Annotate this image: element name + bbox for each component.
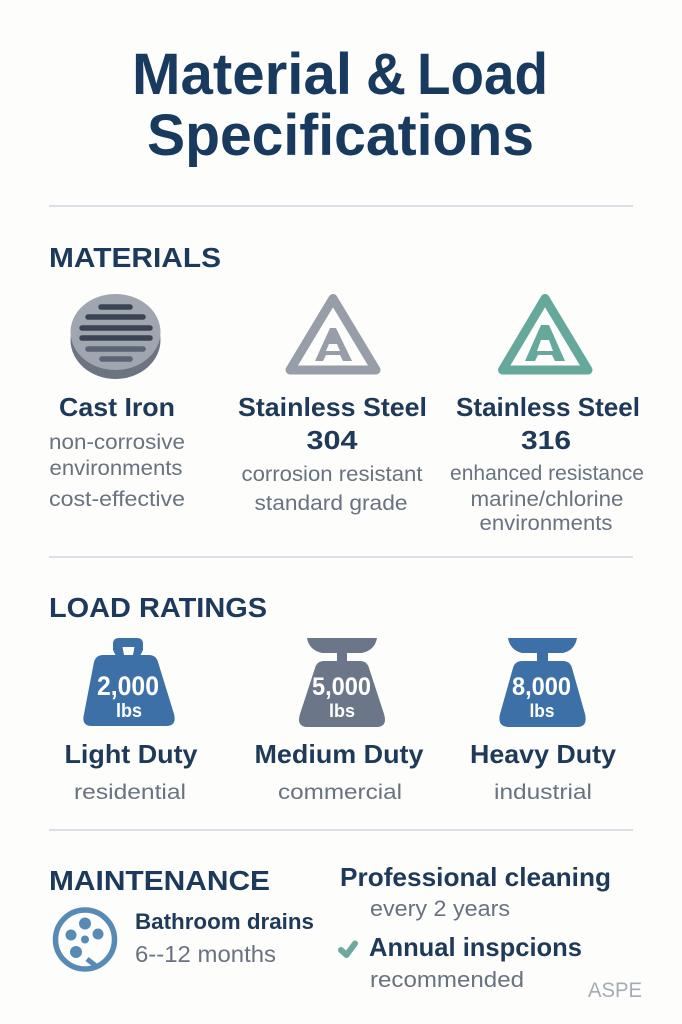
description: stainless steel 304: [242, 463, 423, 515]
title: Specifications: [147, 103, 534, 168]
note: recommended: recommended: [370, 967, 524, 992]
description: cast iron: cost-effective: [49, 488, 185, 511]
panel: annual inspections: [341, 932, 582, 992]
panel: stainless steel 316: [450, 298, 644, 535]
icon: scale 5000 lbs: lbs: [329, 701, 355, 721]
panel: professional cleaning: [340, 862, 611, 921]
label: stainless steel 304: Stainless Steel: [238, 392, 427, 422]
icon: weight 2000 lbs: 2,000: [97, 671, 159, 701]
icon: scale 8000 lbs: lbs: [530, 701, 554, 721]
label: cast iron: Cast Iron: [59, 392, 175, 422]
icon: cast iron drain grate: [70, 294, 160, 379]
icon: weight 2000 lbs: [83, 638, 175, 726]
panel: bathroom drains: [56, 909, 314, 969]
label: heavy duty: Heavy Duty: [470, 739, 617, 769]
interval: 6-12 months: 6--12 months: [135, 941, 276, 967]
interval: every 2 years: every 2 years: [370, 896, 510, 921]
label: stainless steel 304: [238, 392, 427, 455]
icon: scale 5000 lbs: 5,000: [312, 673, 371, 701]
label: stainless steel 316: Stainless Steel: [456, 392, 640, 422]
icon: scale 8000 lbs: 8,000: [512, 673, 571, 701]
description: stainless steel 316: [450, 462, 644, 535]
icon: weight 2000 lbs: lbs: [116, 701, 142, 722]
panel: cast iron: [49, 294, 185, 511]
description: stainless steel 316: enhanced resistance: [450, 462, 644, 485]
label: professional cleaning: Professional cleaning: [340, 862, 611, 892]
description: medium duty: commercial: [278, 781, 402, 804]
label: medium duty: Medium Duty: [254, 739, 424, 769]
label: bathroom drains: Bathroom drains: [135, 909, 314, 934]
description: stainless steel 316: environments: [480, 512, 612, 535]
panel: stainless steel 304: [238, 298, 427, 515]
heading: load ratings: LOAD RATINGS: [49, 592, 267, 623]
icon: scale 8000 lbs: [499, 638, 586, 727]
panel: heavy duty: [470, 638, 617, 804]
label: annual inspections: Annual inspcions: [369, 932, 582, 962]
panel: medium duty: [254, 638, 424, 804]
title: &: [366, 42, 406, 107]
description: stainless steel 304: standard grade: [254, 492, 408, 515]
heading: maintenance: MAINTENANCE: [49, 865, 270, 896]
label: stainless steel 316: [456, 392, 640, 455]
label: stainless steel 316: 316: [521, 425, 571, 455]
description: stainless steel 316: marine/chlorine: [470, 488, 624, 511]
source: ASPE: ASPE: [588, 979, 642, 1002]
title: Load: [417, 42, 548, 107]
icon: grey triangle: [290, 298, 376, 370]
heading: materials: MATERIALS: [49, 242, 221, 273]
title: [132, 42, 548, 168]
label: stainless steel 304: 304: [306, 425, 358, 455]
label: light duty: Light Duty: [64, 739, 198, 769]
description: cast iron: [49, 431, 185, 511]
icon: scale 5000 lbs: [299, 638, 385, 727]
description: cast iron: environments: [50, 457, 182, 480]
icon: drain circle: [56, 910, 114, 969]
icon: check mark: [341, 944, 355, 955]
panel: light duty: [64, 638, 198, 804]
description: light duty: residential: [74, 781, 186, 804]
description: cast iron: non-corrosive: [49, 431, 185, 454]
title: Material: [132, 42, 352, 107]
description: stainless steel 304: corrosion resistant: [242, 463, 423, 486]
description: heavy duty: industrial: [494, 781, 592, 804]
icon: green triangle: [502, 298, 588, 370]
